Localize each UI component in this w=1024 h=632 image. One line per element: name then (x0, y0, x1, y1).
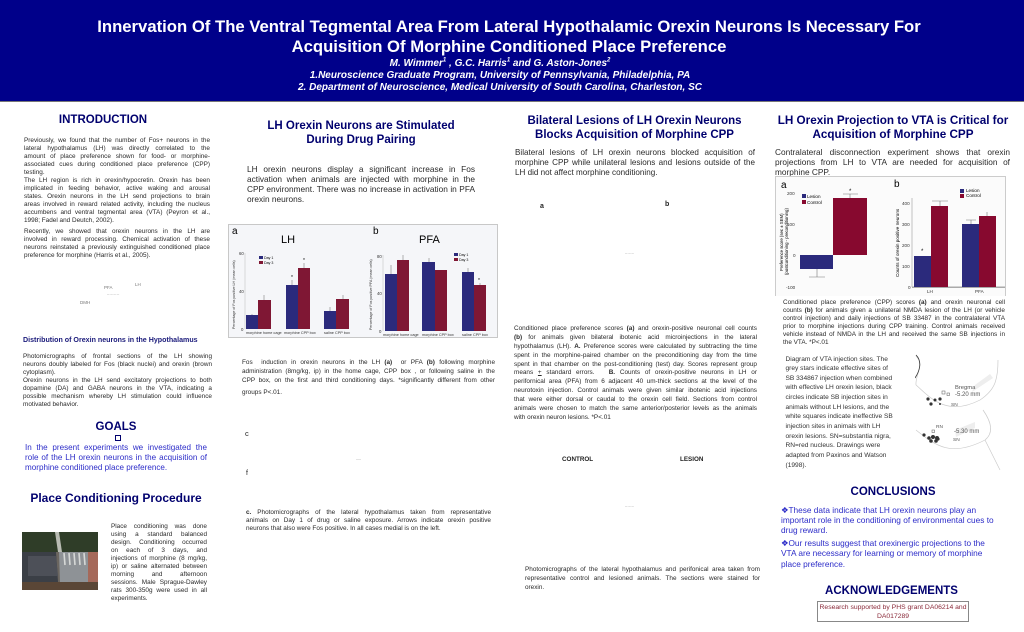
diagram: brain sections: -5.30 mm (954, 429, 979, 435)
chart b: PFA: morphine home cage (383, 333, 419, 337)
chart a: preference score: * (849, 189, 852, 195)
text: VTA injection sites: SB 334867 injection when combined (786, 375, 892, 382)
heading: column 3: Blocks Acquisition of Morphine CPP (535, 129, 734, 141)
caption: lesion photomicrographs: representative control and lesioned animals. The sections were stained for (525, 575, 760, 582)
icon: hollow bullet (115, 435, 121, 441)
text: column 3 intro: LH did not affect morphine conditioning. (515, 168, 657, 177)
heading: column 4: Acquisition of Morphine CPP (812, 128, 974, 141)
caption: disconnection: control injection) and daily injections of SB 33487 in the contralateral VTA (783, 315, 1005, 322)
figure labels: control and lesion (562, 456, 703, 463)
text: introduction: implicated in feeding behavior, active waking and arousal (24, 185, 210, 192)
heading: column 2: During Drug Pairing (306, 134, 416, 146)
chart b: orexin counts: Control (966, 193, 981, 198)
chart a: LH: 60 (239, 251, 244, 256)
text: column 3 intro: Bilateral lesions of LH orexin neurons blocked acquisition of (515, 148, 755, 157)
text: introduction: The LH region is rich in orexin/hypocretin. Orexin has been (24, 177, 210, 184)
authors and affiliations: M. Wimmer1 , G.C. Harris1 and G. Aston-Jones2 (390, 57, 610, 68)
caption: disconnection (783, 299, 1005, 346)
figure labels: control and lesion: LESION (680, 456, 703, 463)
authors and affiliations (298, 57, 702, 92)
heading: distribution: Distribution of Orexin neurons in the Hypothalamus (23, 336, 198, 344)
caption: lesion photomicrographs (525, 566, 760, 591)
text: column 4 intro: Contralateral disconnection experiment shows that orexin (775, 147, 1010, 157)
chart b: PFA: Day 3 (459, 258, 468, 262)
chart b: orexin counts: * (921, 249, 924, 255)
chart b: orexin counts: 100 (902, 264, 910, 269)
text: place conditioning: ip) or saline alternated between (111, 563, 207, 570)
heading: column 4 (778, 114, 1008, 141)
caption: Fos induction: Fos induction in orexin neurons in the LH (a) or PFA (b) following morphine (242, 359, 495, 366)
caption: disconnection: prior to morphine injections during CPP training. Control animals received (783, 323, 1005, 330)
text: VTA injection sites: RN=red nucleus. Drawings were (786, 442, 880, 449)
chart b: orexin counts: PFA (975, 289, 985, 294)
text: VTA injection sites: injection sites in animals with LH (786, 423, 880, 430)
chart a: LH: morphine CPP box (284, 331, 316, 335)
text: introduction: 1998; Fadel and Deutch, 2002). (24, 217, 114, 224)
chart b: PFA: morphine CPP box (422, 333, 454, 337)
tiny scale mark: — — — (625, 505, 634, 508)
text: conclusions: drug reward. ❖Our results suggest that orexinergic projections to the (781, 525, 985, 548)
diagram: brain sections: SN (953, 437, 960, 443)
text: distribution: cytoplasm). (23, 369, 56, 376)
chart: Fos in LH and PFA: a (232, 226, 238, 237)
text: column 2 intro: CPP environment. There was no increase in activation in PFA (247, 184, 475, 194)
chart: disconnection results: a (781, 180, 787, 191)
chart b: PFA: * (478, 278, 480, 284)
chart b: PFA: 0 (379, 329, 382, 334)
caption: lesion scores: animals were chosen to match the same anterior/posterior levels as the animals (514, 405, 757, 412)
text: place conditioning: injections of morphine (8 mg/kg, (111, 555, 207, 562)
chart: Fos in LH and PFA: PFA (419, 234, 440, 246)
diagram: brain sections: RN (936, 424, 943, 430)
chart a: preference score: 100 (787, 222, 795, 227)
text: place conditioning: on each of 3 days, and (111, 547, 207, 554)
text: column 3 intro (515, 148, 755, 177)
text: introduction: testing. (24, 169, 45, 176)
caption: Fos induction: administration (8mg/kg, ip) in the home cage, CPP box , or following saline in the (242, 368, 495, 375)
figure labels: panel c: —— (356, 458, 361, 461)
diagram: brain sections: -5.20 mm (955, 392, 980, 398)
text: introduction: neurons reinstated a previously extinguished conditioned place (24, 244, 210, 251)
chart b: PFA: Day 1 (459, 253, 468, 257)
chart a: preference score: 0 (793, 253, 796, 258)
text: place conditioning: design. Conditioning occurred (111, 539, 207, 546)
chart a: LH: 0 (241, 327, 244, 332)
heading: column 2 (267, 120, 455, 146)
chart: Fos in LH and PFA (228, 224, 498, 338)
caption: lesion scores: spent in that chamber on the post-conditioning (test) day. Scores represent group (514, 360, 757, 368)
chart a: preference score: Preference score (sec ± SEM) (779, 213, 784, 271)
heading: column 2: LH Orexin Neurons are Stimulated (267, 120, 455, 132)
caption: lesion scores: (b) for animals given bilateral ibotenic acid microinjections in the lateral (514, 334, 757, 341)
text: column 4 intro: projections from LH to VTA are needed for acquisition of (775, 157, 1010, 167)
authors and affiliations: 1.Neuroscience Graduate Program, University of Pennsylvania, Philadelphia, PA (310, 70, 690, 80)
text: introduction: areas involved in reward related activity, including the nucleus (24, 201, 210, 208)
heading: column 3: Bilateral Lesions of LH Orexin Neurons (527, 115, 742, 127)
caption: Fos induction: groups P<.01. (242, 389, 282, 396)
chart a: LH: saline CPP box (324, 331, 350, 335)
text: conclusions: VTA are necessary for learning or memory of morphine (781, 548, 982, 558)
chart a: LH: morphine home cage (246, 331, 282, 335)
caption: panel c (246, 509, 491, 532)
figure labels: hypothalamus: DMH (80, 300, 90, 305)
text: VTA injection sites: Diagram of VTA injection sites. The (786, 356, 888, 362)
caption: Fos induction: CPP box, on the first and third conditioning days. *significantly different from other (242, 377, 495, 384)
text: introduction: involved in reward processing. Chemical activation of these (24, 236, 210, 243)
chart a: LH (232, 251, 350, 335)
title (97, 17, 921, 56)
heading: introduction: INTRODUCTION (59, 114, 147, 126)
text: introduction: states. Orexin neurons in the LH send projections to brain (24, 193, 210, 200)
text: place conditioning: rats 300-350g were used in all (111, 587, 207, 594)
chart a: preference score: -100 (786, 285, 796, 290)
caption: panel c: neurons that also were Fos positive. In all cases medial is on the left. (246, 525, 441, 532)
text: introduction: amount of place preference shown for food- or morphine- (24, 153, 210, 160)
figure labels: control and lesion: CONTROL (562, 456, 593, 463)
chart b: PFA: 80 (377, 254, 382, 259)
text: VTA injection sites (786, 356, 893, 469)
figure labels: panel c: f (246, 470, 248, 477)
caption: lesion scores: perifornical area (PFA) from 6 adjacent 40 um-thick sections at the level of the (514, 378, 757, 385)
text: conclusions: important role in the conditioning of environmental cues to (781, 515, 994, 525)
heading: acknowledgements: ACKNOWLEDGEMENTS (825, 585, 958, 597)
chart a: preference score: (postconditioning - preconditioning) (784, 208, 789, 275)
caption: lesion photomicrographs: orexin. (525, 584, 544, 591)
text: introduction: associated cues during conditioned place preference (CPP) (24, 161, 210, 168)
chart b: orexin counts: 400 (902, 201, 910, 206)
chart b: PFA (369, 253, 488, 337)
figure labels: a and b: a (540, 203, 544, 210)
text: distribution: Orexin neurons in the LH send excitatory projections to both (23, 377, 212, 384)
chart a: preference score: Control (807, 200, 822, 205)
text: introduction: lateral hypothalamus (LH) was directly correlated to the (24, 145, 210, 152)
figure labels: panel c: c (245, 429, 249, 438)
chart a: LH: Day 1 (264, 256, 273, 260)
text: conclusions: place preference. (781, 559, 845, 569)
chart a: LH: 40 (239, 289, 244, 294)
diagram: brain sections: SN (951, 402, 958, 408)
figure labels: hypothalamus: — — — — (107, 293, 119, 296)
figure labels: panel c (245, 429, 361, 477)
text: VTA injection sites: circles indicate SB injection sites in (786, 394, 888, 401)
text: goals: morphine conditioned place preference. (25, 463, 167, 472)
heading: column 3 (527, 115, 742, 141)
chart b: PFA: Percentage of Fos positive PFA (mean cells) (369, 259, 373, 330)
caption: lesion scores: hypothalamus (LH). A. Preference scores were calculated by subtracting the time (514, 343, 757, 350)
chart b: orexin counts (895, 188, 1005, 294)
text: goals: role of the LH orexin neurons in the acquisition of (25, 453, 207, 462)
caption: lesion scores: Conditioned place preference scores (a) and orexin-positive neuronal cell counts (514, 325, 757, 332)
text: distribution (23, 353, 212, 408)
text: distribution: motivated behavior. (23, 401, 78, 408)
chart b: orexin counts: 200 (902, 243, 910, 248)
text: introduction: Recently, we showed that orexin neurons in the LH are (24, 228, 210, 235)
chart b: orexin counts: Counts of orexin positive neurons (895, 208, 900, 277)
text: introduction: preference for morphine (Harris et al., 2005). (24, 252, 150, 259)
caption: disconnection: vehicle instead of NMDA in the LH and received the same SB injections in (783, 331, 1005, 338)
caption: disconnection: the VTA. *P<.01 (783, 339, 829, 346)
text: column 2 intro (247, 164, 475, 204)
figure labels: hypothalamus (80, 282, 141, 305)
diagram: brain sections (915, 354, 1000, 470)
text: VTA injection sites: with effective LH orexin lesion, black (786, 384, 892, 391)
caption: lesion scores: that were either dorsal or caudal to the orexin cell field. Sections from control (514, 396, 757, 403)
chart b: orexin counts: Lesion (966, 188, 980, 193)
diagram: brain sections: Bregma (955, 385, 976, 391)
chart: Fos in LH and PFA: LH (281, 234, 295, 246)
text: column 4 intro: morphine CPP. (775, 167, 830, 177)
chart b: orexin counts: 0 (908, 285, 911, 290)
caption: lesion scores: spent in the morphine-paired chamber on the preconditioning day from the time (514, 352, 757, 359)
figure labels: a and b: — — — (625, 252, 634, 255)
chart a: LH: * (303, 258, 305, 264)
text: VTA injection sites: orexin lesions. SN=substantia nigra, (786, 433, 891, 440)
callout: funding: DA017289 (877, 613, 909, 620)
text: introduction: accumbens and ventral tegmental area (VTA) (Peyron et al., (24, 209, 210, 216)
text: VTA injection sites: animals without LH lesions, and the (786, 404, 889, 411)
chart a: LH: Day 3 (264, 261, 273, 265)
text: VTA injection sites: white squares indicate ineffective SB (786, 413, 893, 420)
text: place conditioning: morning and afternoon (111, 571, 207, 578)
text: place conditioning: using a standard balanced (111, 531, 207, 538)
chart b: orexin counts: LH (927, 289, 933, 294)
text: VTA injection sites: grey stars indicate effective sites of (786, 365, 888, 372)
text: place conditioning (111, 523, 207, 602)
caption: panel c: c. Photomicrographs of the lateral hypothalamus taken from representative (246, 509, 491, 516)
text: place conditioning: experiments. (111, 595, 148, 602)
text: distribution: neurons doubly labeled for Fos (black nuclei) and orexin (brown (23, 361, 212, 368)
figure labels: hypothalamus: LH (135, 282, 141, 287)
text: distribution: possible mechanism whereby LH stimulation could influence (23, 393, 212, 400)
caption: disconnection: counts (b) for animals given a unilateral NMDA lesion of the LH (or vehicle (783, 307, 1005, 314)
text: place conditioning: sessions. Male Sprague-Dawley (111, 579, 207, 586)
text: VTA injection sites: (1998). (786, 462, 806, 469)
photo: conditioning apparatus (22, 532, 98, 590)
text: column 4 intro (775, 147, 1010, 177)
caption: lesion scores (514, 325, 757, 421)
text: distribution: Photomicrographs of frontal sections of the LH showing (23, 353, 212, 360)
heading: conclusions: CONCLUSIONS (851, 486, 935, 498)
text: column 2 intro: LH orexin neurons display a significant increase in Fos (247, 164, 475, 174)
caption: disconnection: Conditioned place preference (CPP) scores (a) and orexin neuronal cell (783, 299, 1005, 306)
chart b: orexin counts: 300 (902, 222, 910, 227)
chart: Fos in LH and PFA: b (373, 226, 379, 237)
text: column 2 intro: orexin neurons. (247, 194, 304, 204)
title: Innervation Of The Ventral Tegmental Area From Lateral Hypothalamic Orexin Neurons Is Necessary For (97, 17, 921, 36)
authors and affiliations: 2. Department of Neuroscience, Medical University of South Carolina, Charleston, SC (298, 82, 702, 92)
text: column 3 intro: morphine CPP while unilateral lesions and lesions outside of the (515, 158, 755, 167)
chart a: preference score: Lesion (807, 194, 821, 199)
heading: column 4: LH Orexin Projection to VTA is Critical for (778, 114, 1008, 127)
text: VTA injection sites: adapted from Paxinos and Watson (786, 452, 886, 459)
caption: lesion photomicrographs: Photomicrographs of the lateral hypothalamus and perifonical area taken from (525, 566, 760, 573)
figure labels: a and b: b (665, 201, 669, 208)
text: place conditioning: Place conditioning was done (111, 523, 207, 530)
chart b: PFA: saline CPP box (462, 333, 488, 337)
callout: funding (817, 601, 969, 622)
caption: lesion scores: neurotoxin injection. Control animals were given similar ibotenic acid injections (514, 387, 757, 394)
chart b: PFA: 40 (377, 291, 382, 296)
chart a: preference score: 200 (787, 191, 795, 196)
caption: lesion scores: means + standard errors. B. Counts of orexin-positive neurons in LH or (514, 369, 757, 376)
caption: lesion scores: with orexin neuron lesions. *P<.01 (514, 414, 611, 421)
text: introduction (24, 137, 210, 259)
chart: disconnection results (775, 176, 1006, 296)
figure labels: hypothalamus: PFA (104, 285, 113, 290)
header banner (0, 0, 1024, 102)
heading: goals: GOALS (96, 421, 136, 433)
chart a: preference score (779, 189, 867, 290)
caption: panel c: animals on Day 1 of drug or saline exposure. Arrows indicate orexin positive (246, 517, 491, 524)
text: distribution: dopamine (DA) and GABA neurons in the VTA, indicating a (23, 385, 212, 392)
heading: place conditioning: Place Conditioning Procedure (30, 491, 202, 505)
text: column 2 intro: activation when animals are injected with morphine in the (247, 174, 475, 184)
callout: funding: Research supported by PHS grant DA06214 and (820, 604, 966, 611)
text: conclusions: ❖These data indicate that LH orexin neurons play an (781, 505, 976, 515)
text: introduction: Previously, we found that the number of Fos+ neurons in the (24, 137, 210, 144)
text: conclusions (781, 505, 994, 569)
chart a: LH: * (291, 275, 293, 281)
text: goals: In the present experiments we investigated the (25, 443, 207, 452)
figure labels: a and b (540, 200, 669, 255)
text: goals (25, 443, 207, 472)
caption: Fos induction (242, 359, 495, 396)
chart a: LH: Percentage of Fos positive LH (mean cells) (232, 260, 236, 329)
title: Acquisition Of Morphine Conditioned Place Preference (292, 36, 726, 56)
chart: disconnection results: b (894, 179, 900, 190)
